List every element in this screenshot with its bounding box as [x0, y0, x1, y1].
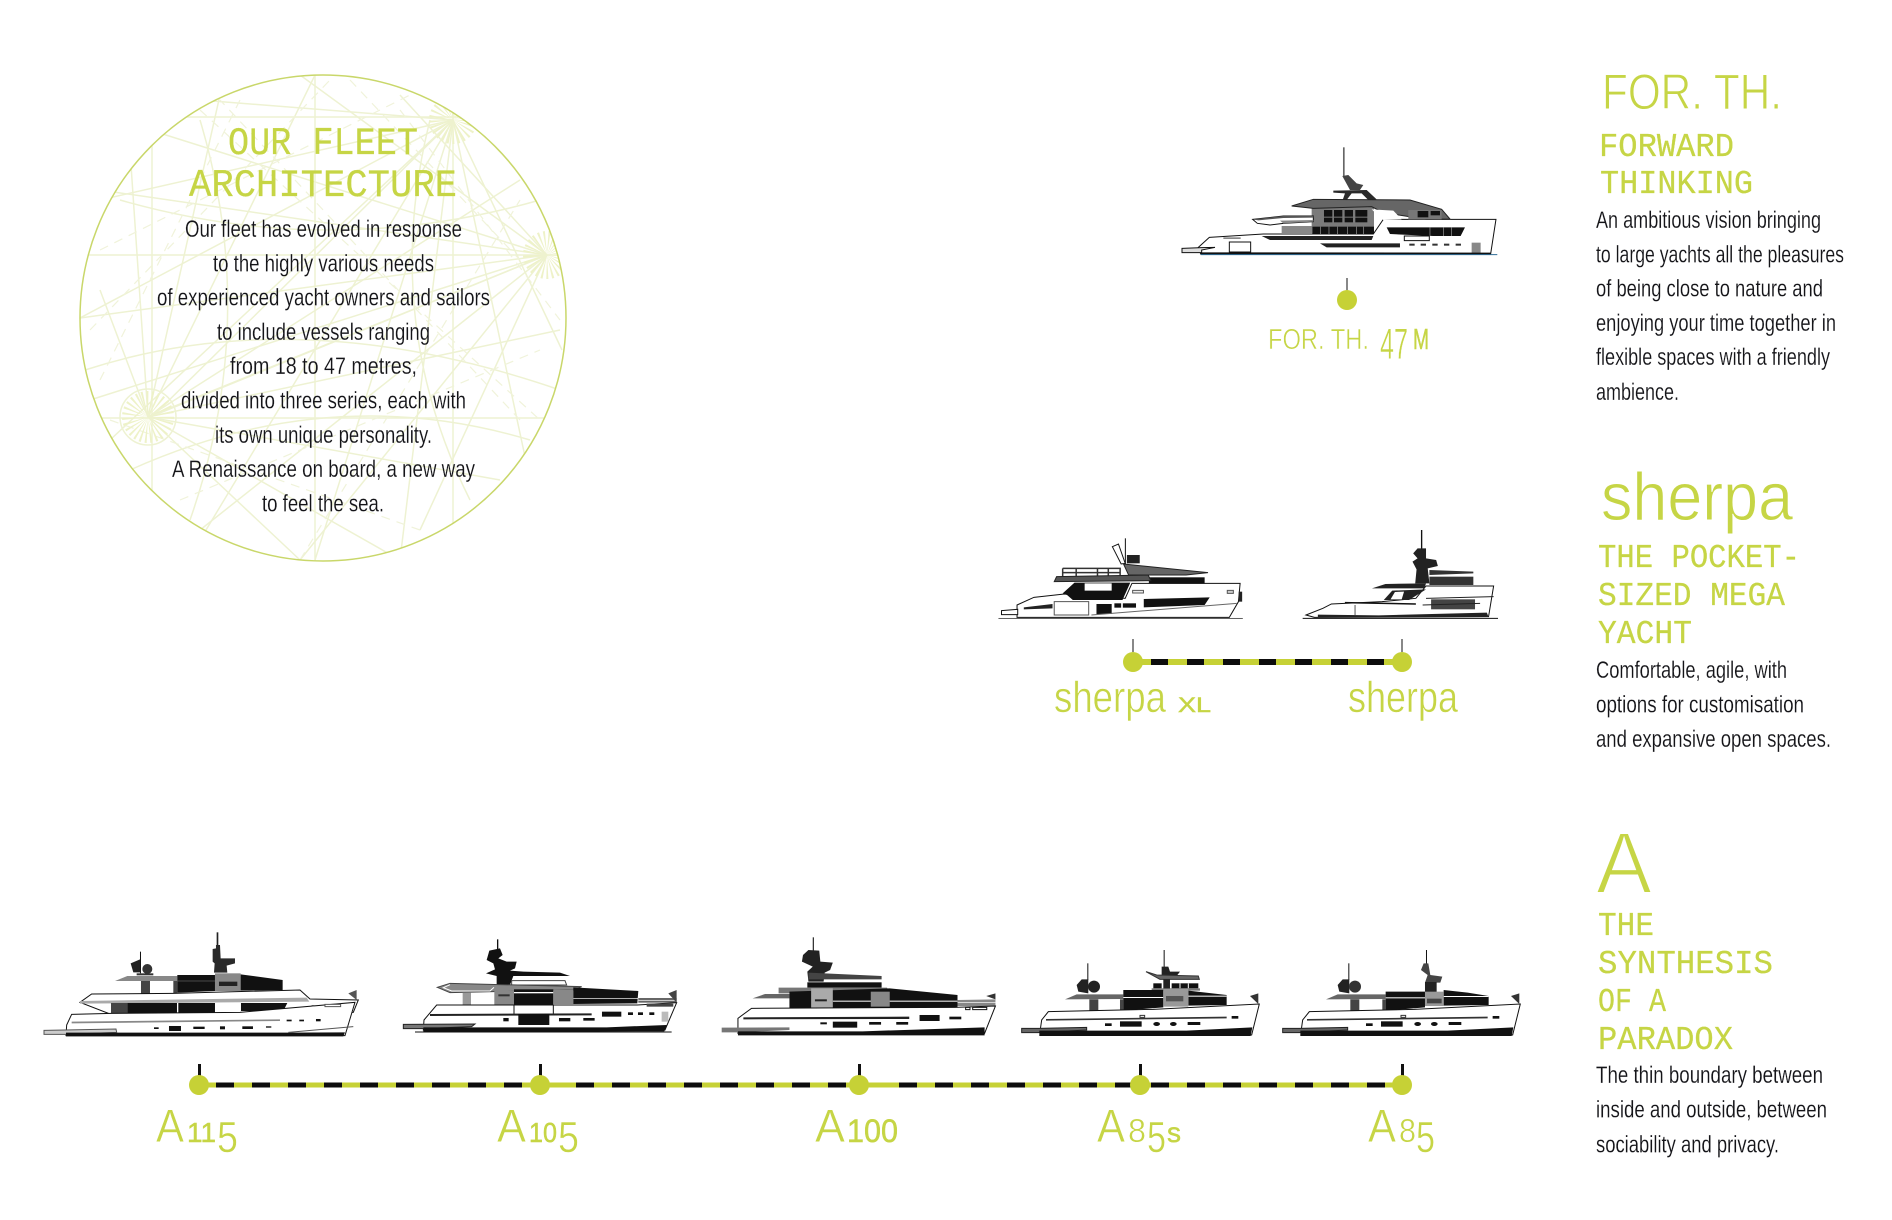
text: A body: inside and outside, between	[1596, 1096, 1827, 1124]
yacht: Sherpa XL	[998, 538, 1243, 619]
subheading: forward thinking: THINKING	[1600, 166, 1753, 203]
label: A105: A	[497, 1100, 526, 1152]
circle body text: its own unique personality.	[215, 422, 432, 449]
circle body text: Our fleet has evolved in response	[185, 216, 462, 243]
subheading: the pocket-sized mega yacht: SIZED MEGA	[1598, 578, 1785, 615]
circle body text: to the highly various needs	[213, 250, 434, 278]
heading: A: A	[1596, 815, 1652, 912]
sherpa timeline	[1123, 639, 1412, 672]
label: sherpa XL: sherpa	[1054, 673, 1166, 722]
subheading: forward thinking: FORWARD	[1599, 129, 1734, 166]
panel: our fleet architecture circle	[79, 74, 567, 562]
label: sherpa XL: XL	[1178, 694, 1211, 717]
label: A115: A	[156, 1100, 184, 1152]
subheading: the synthesis of a paradox	[1598, 908, 1773, 1059]
label: A105: 10	[529, 1117, 557, 1148]
text: FOR.TH. body: An ambitious vision bringing	[1596, 207, 1821, 234]
text: FOR.TH. body	[1596, 207, 1844, 406]
text: A body	[1596, 1062, 1827, 1158]
subheading: the synthesis of a paradox: THE	[1598, 908, 1654, 945]
panel: FOR.TH. description	[1596, 64, 1844, 406]
label: sherpa: sherpa	[1348, 673, 1458, 722]
yacht: A85	[1283, 950, 1520, 1036]
text: A body: sociability and privacy.	[1596, 1132, 1779, 1158]
A series timeline	[189, 1064, 1412, 1095]
label: A115: 11	[187, 1117, 216, 1148]
panel: A description	[1596, 815, 1827, 1158]
circle body text: to feel the sea.	[262, 490, 384, 518]
label: A100: 100	[847, 1113, 898, 1149]
circle heading: ARCHITECTURE	[189, 164, 457, 208]
circle heading: OUR FLEET	[228, 122, 418, 166]
heading: sherpa: sherpa	[1601, 459, 1793, 535]
circle heading	[189, 122, 457, 208]
subheading: the pocket-sized mega yacht: YACHT	[1598, 616, 1692, 653]
FOR.TH. marker	[1337, 278, 1357, 310]
yacht: A100	[722, 937, 995, 1035]
subheading: the synthesis of a paradox: OF A	[1598, 984, 1666, 1021]
subheading: the pocket-sized mega yacht	[1598, 540, 1800, 653]
circle body text: divided into three series, each with	[181, 388, 466, 414]
circle body text: to include vessels ranging	[217, 319, 430, 346]
text: FOR.TH. body: of being close to nature and	[1596, 276, 1823, 302]
label: A85s: A	[1097, 1100, 1125, 1152]
yacht: A105	[403, 939, 677, 1032]
label: FOR. TH. 47M: 47	[1380, 320, 1408, 369]
yacht: A85s	[1022, 950, 1259, 1036]
circle compass-line background	[80, 76, 562, 560]
label: A85: 5	[1416, 1113, 1435, 1162]
text: sherpa body: and expansive open spaces.	[1596, 726, 1831, 753]
text: sherpa body: Comfortable, agile, with	[1596, 657, 1787, 684]
text: sherpa body: options for customisation	[1596, 692, 1804, 718]
circle outline	[80, 75, 566, 561]
label: FOR. TH. 47M: FOR. TH.	[1268, 324, 1369, 356]
label: A105: 5	[558, 1113, 579, 1162]
text: sherpa body	[1596, 657, 1831, 753]
label: A115: 5	[217, 1113, 238, 1162]
yacht: FOR.TH. 47M	[1182, 147, 1497, 255]
subheading: forward thinking	[1599, 129, 1753, 203]
text: FOR.TH. body: ambience.	[1596, 379, 1679, 406]
yacht: A115	[44, 932, 358, 1036]
subheading: the synthesis of a paradox: SYNTHESIS	[1598, 946, 1773, 983]
circle body text	[157, 216, 490, 518]
heading: FOR. TH.: FOR. TH.	[1602, 64, 1782, 120]
panel: sherpa description	[1596, 459, 1831, 753]
circle body text: A Renaissance on board, a new way	[172, 456, 475, 483]
yacht: Sherpa	[1303, 530, 1498, 618]
label: A85s: s	[1167, 1117, 1181, 1148]
subheading: the synthesis of a paradox: PARADOX	[1598, 1022, 1733, 1059]
label: A100: A	[815, 1100, 845, 1152]
subheading: the pocket-sized mega yacht: THE POCKET-	[1598, 540, 1800, 577]
circle body text: of experienced yacht owners and sailors	[157, 284, 490, 312]
label: FOR. TH. 47M: M	[1413, 324, 1429, 356]
label: A85s: 8	[1128, 1112, 1146, 1149]
label: A85s: 5	[1147, 1113, 1166, 1162]
circle body text: from 18 to 47 metres,	[230, 353, 417, 380]
label: A85: A	[1368, 1100, 1396, 1152]
text: A body: The thin boundary between	[1596, 1062, 1823, 1089]
label: A85: 8	[1399, 1112, 1416, 1149]
